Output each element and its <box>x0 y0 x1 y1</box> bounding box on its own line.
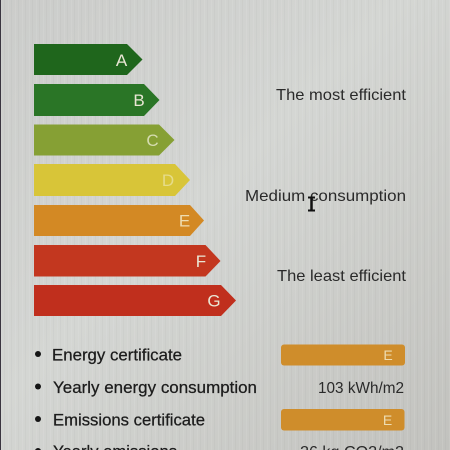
row: emissions certificate: Emissions certificate <box>53 412 205 430</box>
rating arrow A: A <box>116 51 128 70</box>
rating arrow F <box>34 245 220 276</box>
row: energy certificate: Energy certificate <box>52 346 182 364</box>
row: yearly energy consumption <box>35 379 404 397</box>
row: emissions certificate: E <box>383 412 392 428</box>
rating arrow D <box>34 164 190 196</box>
icon: text cursor <box>308 198 315 210</box>
energy rating scale <box>34 44 236 316</box>
row: yearly energy consumption: Yearly energy consumption <box>53 379 257 397</box>
row: yearly emissions <box>35 443 404 450</box>
rating arrow D: D <box>162 171 174 190</box>
row: energy certificate: E <box>383 347 393 363</box>
row: emissions certificate <box>35 409 404 430</box>
scale caption: medium consumption: Medium consumption <box>245 188 406 205</box>
scale caption: most efficient: The most efficient <box>276 87 407 104</box>
rating arrow F: F <box>196 252 206 271</box>
rating arrow B <box>34 84 160 116</box>
rating arrow C: C <box>146 131 159 150</box>
rating arrow E: E <box>179 212 190 230</box>
rating arrow A <box>34 44 142 75</box>
row: energy certificate <box>35 344 405 366</box>
rating arrow G: G <box>207 292 221 310</box>
rating arrow B: B <box>133 91 145 110</box>
rating arrow G <box>34 285 236 316</box>
rating arrow C <box>34 124 174 156</box>
scale caption: least efficient: The least efficient <box>277 268 407 285</box>
rating arrow E <box>34 205 204 236</box>
row: yearly energy consumption: 103 kWh/m2 <box>318 380 404 397</box>
